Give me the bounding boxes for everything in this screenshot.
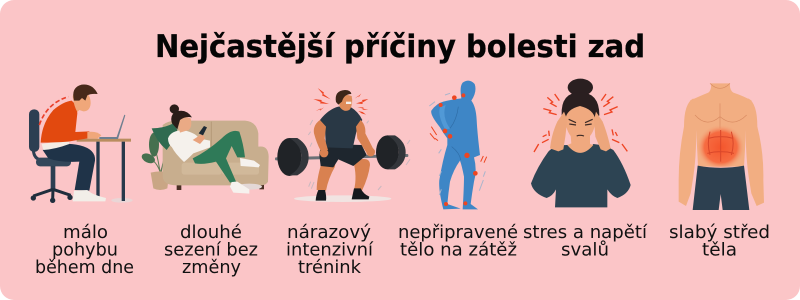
desk and laptop <box>77 115 133 203</box>
label: málo pohybu během dne: během dne <box>35 257 134 278</box>
label: slabý střed těla: slabý střed <box>669 222 770 243</box>
icon: man sitting at laptop <box>29 85 133 203</box>
icon: woman on sofa with phone <box>140 104 269 194</box>
shorts <box>693 166 749 210</box>
motion marks <box>308 120 410 190</box>
label: nepřipravené tělo na zátěž <box>398 222 518 260</box>
label: nepřipravené tělo na zátěž: tělo na zátěž <box>400 240 517 260</box>
label: nárazový intenzivní trénink: trénink <box>298 257 362 278</box>
lifter <box>314 90 375 201</box>
hands <box>550 112 611 151</box>
pain bolts <box>534 94 627 152</box>
icon: stressed woman holding head <box>531 79 631 207</box>
hair <box>562 79 599 125</box>
icon: man lifting barbell <box>275 88 410 202</box>
label: nárazový intenzivní trénink: intenzivní <box>286 240 374 260</box>
title: Nejčastější příčiny bolesti zad <box>155 29 645 65</box>
sweater <box>531 144 631 207</box>
motion marks <box>430 127 487 163</box>
abdominal lines <box>707 130 734 162</box>
plant <box>140 133 175 190</box>
label: dlouhé sezení bez změny: změny <box>182 257 241 278</box>
label: málo pohybu během dne: málo <box>63 222 108 243</box>
pain points <box>439 93 478 206</box>
man <box>39 85 106 201</box>
torso <box>690 83 752 167</box>
label: nepřipravené tělo na zátěž: nepřipravené <box>398 222 518 243</box>
label: slabý střed těla: těla <box>702 240 737 260</box>
arms <box>679 98 764 206</box>
label: slabý střed těla <box>669 222 770 260</box>
woman <box>168 104 262 194</box>
blue figure <box>431 81 480 209</box>
label: málo pohybu během dne: pohybu <box>52 240 118 260</box>
label: stres a napětí svalů: stres a napětí <box>523 222 648 243</box>
face and neck <box>565 106 595 153</box>
label: dlouhé sezení bez změny: dlouhé <box>180 222 242 243</box>
pain bolts <box>313 88 368 115</box>
label: nárazový intenzivní trénink <box>286 222 374 278</box>
core glow <box>697 125 745 170</box>
facial features <box>569 119 593 136</box>
barbell <box>275 135 408 176</box>
icon: blue body with pain points <box>429 81 487 209</box>
chest lines <box>695 83 747 128</box>
pillow <box>152 123 177 150</box>
label: stres a napětí svalů: svalů <box>561 240 609 260</box>
label: dlouhé sezení bez změny <box>164 222 258 278</box>
label: málo pohybu během dne <box>35 222 134 278</box>
label: stres a napětí svalů <box>523 222 648 260</box>
office chair <box>29 109 73 203</box>
label: dlouhé sezení bez změny: sezení bez <box>164 240 258 260</box>
label: nárazový intenzivní trénink: nárazový <box>287 222 371 243</box>
sofa <box>163 121 269 190</box>
floor shadow <box>294 195 391 202</box>
icon: torso with glowing core <box>679 83 764 210</box>
